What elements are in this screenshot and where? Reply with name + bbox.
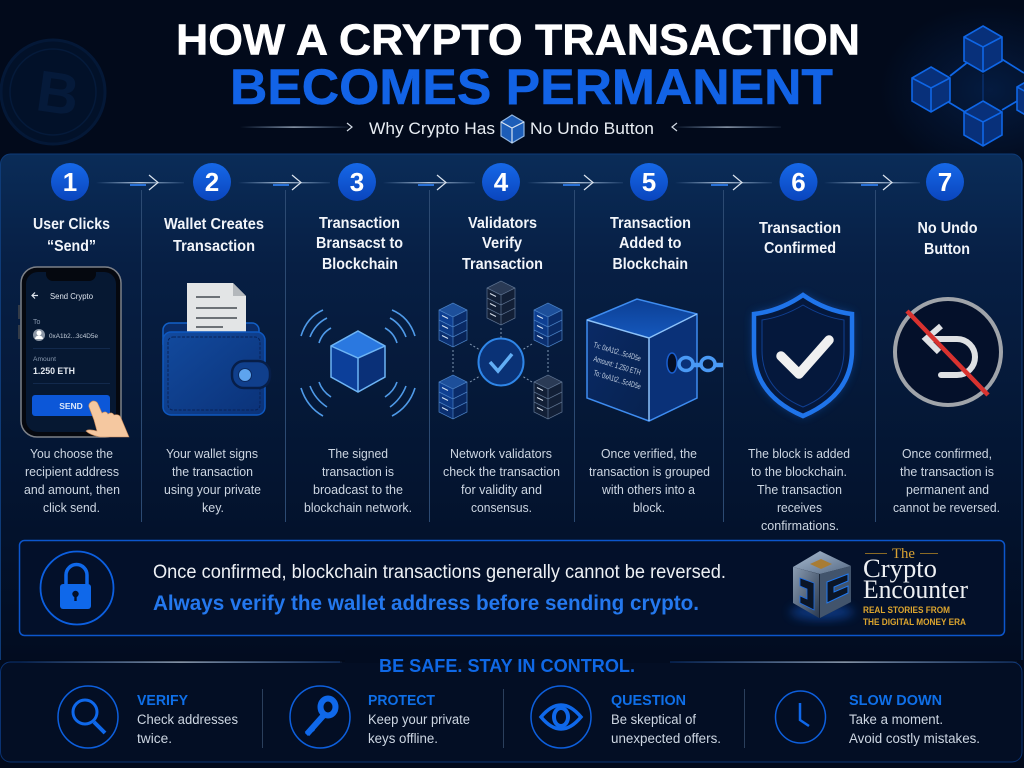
description 4: check the transaction xyxy=(443,464,560,479)
description 5: block. xyxy=(633,500,665,515)
heading 7 xyxy=(918,220,978,258)
description 3 xyxy=(304,446,412,515)
number badge 3 xyxy=(338,163,376,201)
arrow: step 2 to 3 xyxy=(238,175,330,190)
tip: question xyxy=(531,686,721,748)
heading 4: Verify xyxy=(482,235,522,252)
number badge 4: 4 xyxy=(494,167,509,197)
number badge 6 xyxy=(780,163,818,201)
icon: validator network xyxy=(439,281,562,419)
heading 5: Blockchain xyxy=(612,256,688,273)
number badge 2 xyxy=(193,163,231,201)
description 6: The block is added xyxy=(748,446,850,461)
tip: verify xyxy=(58,686,238,748)
step 3 xyxy=(301,163,415,515)
icon: phone with send button: 0xA1b2...3c4D5e xyxy=(49,333,98,340)
tip: protect: keys offline. xyxy=(368,731,438,746)
title: BECOMES PERMANENT xyxy=(230,59,833,115)
description 7: the transaction is xyxy=(900,464,994,479)
warning text: Always verify the wallet address before sending crypto. xyxy=(153,592,699,615)
heading 7: No Undo xyxy=(918,220,978,237)
icon: crossed out undo xyxy=(895,299,1001,405)
arrow: step 4 to 5 xyxy=(527,175,623,190)
subtitle: Why Crypto Has xyxy=(369,120,495,138)
heading 4: Transaction xyxy=(462,256,543,273)
server stack top xyxy=(487,281,515,325)
description 1: click send. xyxy=(43,500,100,515)
description 3: blockchain network. xyxy=(304,500,412,515)
icon: shield with check xyxy=(754,295,852,416)
panel: safety tips xyxy=(0,650,1022,762)
description 7: Once confirmed, xyxy=(902,446,992,461)
description 2: using your private xyxy=(164,482,261,497)
description 1: and amount, then xyxy=(24,482,120,497)
icon: phone with send button: Send Crypto xyxy=(50,292,94,301)
tip: slow down xyxy=(776,691,980,746)
heading 2: Wallet Creates xyxy=(164,216,264,233)
icon: blockchain cube network xyxy=(912,26,1024,146)
panel: warning banner xyxy=(20,540,1004,636)
description 7: cannot be reversed. xyxy=(893,500,1000,515)
description 7 xyxy=(893,446,1000,515)
number badge 7 xyxy=(926,163,964,201)
description 4 xyxy=(443,446,560,515)
number badge 3: 3 xyxy=(350,167,364,197)
icon: faint bitcoin coin xyxy=(1,40,105,144)
description 2: the transaction xyxy=(172,464,253,479)
number badge 1 xyxy=(51,163,89,201)
description 4: consensus. xyxy=(471,500,532,515)
heading 6 xyxy=(759,220,841,257)
logo: The Crypto Encounter: Encounter xyxy=(863,575,968,604)
logo: The Crypto Encounter: The xyxy=(892,546,915,562)
description 6: confirmations. xyxy=(761,518,839,533)
heading 6: Confirmed xyxy=(764,240,836,257)
number badge 1: 1 xyxy=(63,167,77,197)
description 5 xyxy=(589,446,710,515)
heading 2: Transaction xyxy=(173,238,255,255)
panel: seven steps xyxy=(0,154,1022,660)
description 4: Network validators xyxy=(450,446,552,461)
heading 1: “Send” xyxy=(47,238,96,255)
icon: phone with send button: SEND xyxy=(59,401,83,411)
step 5 xyxy=(587,163,723,515)
description 1: You choose the xyxy=(30,446,113,461)
description 6: The transaction xyxy=(757,482,842,497)
description 6: to the blockchain. xyxy=(751,464,847,479)
description 5: with others into a xyxy=(601,482,696,497)
logo: The Crypto Encounter: REAL STORIES FROM xyxy=(863,605,950,616)
description 5: transaction is grouped xyxy=(589,464,710,479)
warning text: Once confirmed, blockchain transactions generally cannot be reversed. xyxy=(153,562,726,583)
description 3: The signed xyxy=(328,446,388,461)
server stack upper right xyxy=(534,303,562,347)
heading 7: Button xyxy=(924,241,970,258)
tip: protect xyxy=(290,686,470,748)
tip: protect: Keep your private xyxy=(368,712,470,727)
heading 1 xyxy=(33,216,110,255)
description 2: Your wallet signs xyxy=(166,446,258,461)
description 2: key. xyxy=(202,500,224,515)
arrow: step 6 to 7 xyxy=(824,175,920,190)
heading 1: User Clicks xyxy=(33,216,110,233)
description 2 xyxy=(164,446,261,515)
description 3: transaction is xyxy=(322,464,394,479)
icon: phone with send button: To xyxy=(33,319,40,326)
icon: phone with send button xyxy=(18,267,129,437)
tip: slow down: SLOW DOWN xyxy=(849,693,942,709)
icon: chained block xyxy=(587,299,723,421)
icon: broadcasting cube xyxy=(301,310,415,416)
description 6 xyxy=(748,446,850,533)
number badge 4 xyxy=(482,163,520,201)
description 5: Once verified, the xyxy=(601,446,697,461)
validator check badge xyxy=(478,338,524,386)
arrow: step 1 to 2 xyxy=(96,175,184,190)
icon: padlock xyxy=(40,552,114,624)
logo: The Crypto Encounter: THE DIGITAL MONEY ERA xyxy=(863,617,966,628)
section heading: BE SAFE. STAY IN CONTROL. xyxy=(379,656,635,676)
number badge 2: 2 xyxy=(205,167,219,197)
heading 3: Blockchain xyxy=(322,256,398,273)
tip: verify: twice. xyxy=(137,731,172,746)
description 7: permanent and xyxy=(906,482,989,497)
title xyxy=(176,16,860,115)
step 2 xyxy=(163,163,270,515)
heading 2 xyxy=(164,216,264,255)
step 1 xyxy=(18,163,129,515)
server stack lower right xyxy=(534,375,562,419)
heading 5: Added to xyxy=(619,235,682,252)
heading 3 xyxy=(316,215,403,273)
tip: question: Be skeptical of xyxy=(611,712,696,727)
number badge 6: 6 xyxy=(791,167,806,197)
tip: slow down: Take a moment. xyxy=(849,712,943,727)
icon: wallet with document xyxy=(163,283,270,415)
icon: chained block: Amount: 1.250 ETH xyxy=(592,354,642,377)
icon: chained block: Tx: 0xA1t2...5c4D5e xyxy=(592,340,642,363)
tip: question: QUESTION xyxy=(611,693,686,709)
heading 4: Validators xyxy=(468,215,537,232)
tip: slow down: Avoid costly mistakes. xyxy=(849,731,980,746)
subtitle xyxy=(240,115,781,143)
description 1: recipient address xyxy=(25,464,119,479)
arrow: step 5 to 6 xyxy=(675,175,772,190)
arrow: step 3 to 4 xyxy=(383,175,475,190)
heading 3: Bransacst to xyxy=(316,235,403,252)
tip: protect: PROTECT xyxy=(368,693,435,709)
logo: The Crypto Encounter xyxy=(790,546,968,628)
heading 4 xyxy=(462,215,543,273)
title: HOW A CRYPTO TRANSACTION xyxy=(176,16,860,64)
icon: phone with send button: 1.250 ETH xyxy=(33,366,75,376)
icon: faint bitcoin coin: B xyxy=(33,58,83,129)
description 3: broadcast to the xyxy=(313,482,403,497)
server stack upper left xyxy=(439,303,467,347)
heading 5 xyxy=(610,215,691,273)
warning text xyxy=(153,562,726,615)
heading 5: Transaction xyxy=(610,215,691,232)
step 7 xyxy=(893,163,1001,515)
number badge 5: 5 xyxy=(642,167,656,197)
tip: question: unexpected offers. xyxy=(611,731,721,746)
icon: phone with send button: Amount xyxy=(33,356,56,363)
heading 6: Transaction xyxy=(759,220,841,237)
server stack lower left xyxy=(439,375,467,419)
description 6: receives xyxy=(777,500,822,515)
icon: chained block: To: 0xA1t2...5c4D5e xyxy=(592,368,642,391)
description 4: for validity and xyxy=(461,482,542,497)
subtitle: No Undo Button xyxy=(530,120,654,138)
step 4 xyxy=(439,163,562,515)
heading 3: Transaction xyxy=(319,215,400,232)
description 1 xyxy=(24,446,120,515)
logo: The Crypto Encounter: Crypto xyxy=(863,554,937,583)
number badge 7: 7 xyxy=(938,167,952,197)
tip: verify: VERIFY xyxy=(137,693,188,709)
tip: verify: Check addresses xyxy=(137,712,238,727)
step 6 xyxy=(748,163,852,533)
number badge 5 xyxy=(630,163,668,201)
